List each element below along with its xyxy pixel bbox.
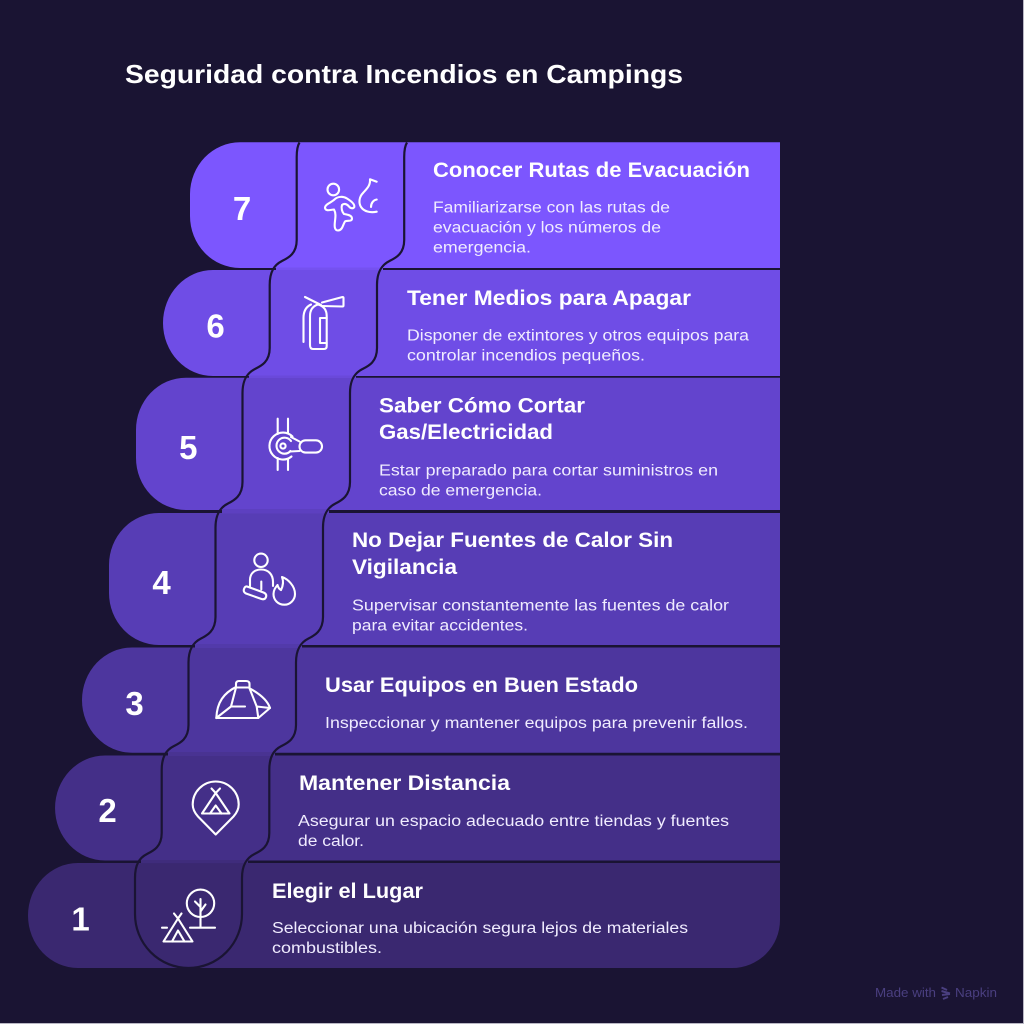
description 2: Asegurar un espacio adecuado entre tiendas y fuentes <box>298 813 729 830</box>
icon: person fleeing fire <box>325 179 377 230</box>
icon: Napkin logo <box>942 988 950 999</box>
description 1: combustibles. <box>272 940 382 957</box>
heading: No Dejar Fuentes de Calor Sin Vigilancia: Vigilancia <box>352 555 458 579</box>
description 7 <box>433 200 670 256</box>
description 6: controlar incendios pequeños. <box>407 348 645 364</box>
panel: step 1 <box>28 863 780 968</box>
panel: step 3 <box>82 648 780 756</box>
number 4: 4 <box>152 564 171 601</box>
icon: tent location pin <box>193 782 239 834</box>
icon: dome tent <box>216 681 270 718</box>
heading: Tener Medios para Apagar: Tener Medios para Apagar <box>407 286 692 310</box>
heading: Elegir el Lugar: Elegir el Lugar <box>272 879 424 903</box>
panel: step 4 <box>109 513 780 648</box>
footer: Made with Napkin: Napkin <box>955 986 997 1000</box>
description 4 <box>352 598 729 634</box>
description 2 <box>298 813 729 850</box>
number 6: 6 <box>206 308 225 344</box>
description 5: Estar preparado para cortar suministros en <box>379 462 718 480</box>
heading: Usar Equipos en Buen Estado: Usar Equipos en Buen Estado <box>325 673 638 697</box>
description 7: Familiarizarse con las rutas de <box>433 200 670 216</box>
description 3: Inspeccionar y mantener equipos para prevenir fallos. <box>325 715 748 732</box>
footer: Made with Napkin <box>875 986 997 1000</box>
description 4: para evitar accidentes. <box>352 618 528 634</box>
heading: No Dejar Fuentes de Calor Sin Vigilancia <box>352 528 673 579</box>
footer: Made with Napkin: Made with <box>875 986 936 1000</box>
description 2: de calor. <box>298 833 364 850</box>
description 6: Disponer de extintores y otros equipos para <box>407 328 749 344</box>
description 7: evacuación y los números de <box>433 220 661 236</box>
number 1: 1 <box>71 900 90 938</box>
connector line: left of icon column <box>135 142 300 968</box>
number 2: 2 <box>98 792 117 829</box>
heading: Conocer Rutas de Evacuación: Conocer Rutas de Evacuación <box>433 158 750 182</box>
number 5: 5 <box>179 429 197 466</box>
connector line: right of icon column <box>242 142 407 914</box>
heading: No Dejar Fuentes de Calor Sin Vigilancia: No Dejar Fuentes de Calor Sin <box>352 528 673 552</box>
icon: fire extinguisher <box>304 297 344 349</box>
description 6 <box>407 328 749 364</box>
panel: step 7 <box>190 142 780 270</box>
description 1: Seleccionar una ubicación segura lejos de materiales <box>272 920 688 937</box>
description 4: Supervisar constantemente las fuentes de calor <box>352 598 729 614</box>
number 7: 7 <box>233 190 251 227</box>
panel: step 2 <box>55 756 780 863</box>
heading: Saber Cómo Cortar Gas/Electricidad <box>379 394 586 444</box>
icon: shut-off valve <box>269 419 322 470</box>
description 5: caso de emergencia. <box>379 482 542 500</box>
description 5 <box>379 462 718 500</box>
panel: step 6 <box>163 270 780 378</box>
title: Seguridad contra Incendios en Campings <box>125 59 683 89</box>
description 1 <box>272 920 688 957</box>
panel: step 5 <box>136 378 780 514</box>
heading: Saber Cómo Cortar Gas/Electricidad: Saber Cómo Cortar <box>379 394 586 418</box>
heading: Mantener Distancia: Mantener Distancia <box>299 771 511 795</box>
description 7: emergencia. <box>433 240 531 256</box>
icon: person by fire <box>244 554 295 605</box>
icon: tent and tree <box>162 890 215 942</box>
heading: Saber Cómo Cortar Gas/Electricidad: Gas/Electricidad <box>379 420 553 444</box>
number 3: 3 <box>125 685 144 722</box>
